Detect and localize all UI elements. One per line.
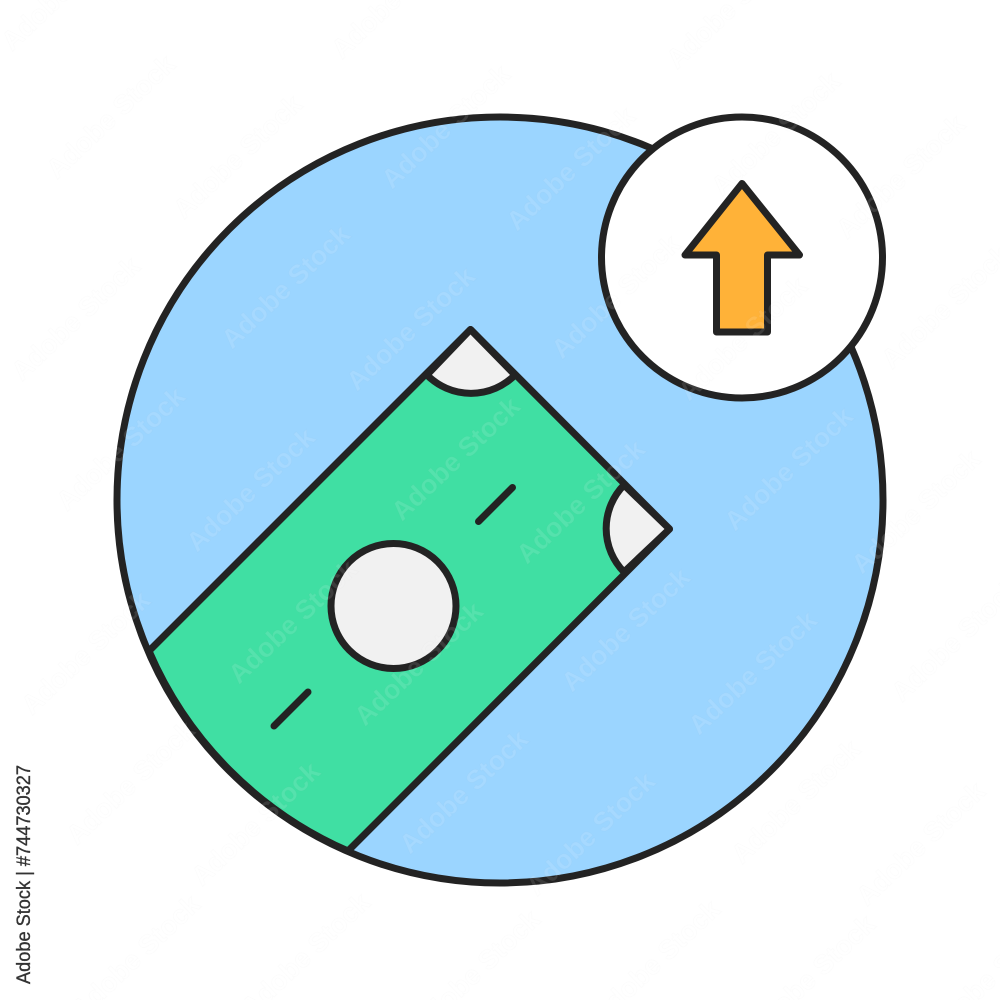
watermark pattern: Adobe Stock xyxy=(167,88,309,224)
watermark pattern: Adobe Stock xyxy=(60,714,202,850)
top corner xyxy=(427,330,515,393)
note body xyxy=(149,330,670,851)
watermark pattern: Adobe Stock xyxy=(180,421,322,557)
watermark pattern: Adobe Stock xyxy=(672,270,814,406)
watermark pattern: Adobe Stock xyxy=(15,584,157,720)
white badge circle xyxy=(602,117,882,398)
watermark pattern: Adobe Stock xyxy=(845,443,987,579)
watermark pattern: Adobe Stock xyxy=(545,228,687,364)
watermark pattern: Adobe Stock xyxy=(393,723,535,859)
watermark pattern: Adobe Stock xyxy=(185,755,327,891)
watermark pattern: Adobe Stock xyxy=(718,400,860,536)
watermark pattern: Adobe Stock xyxy=(830,108,972,244)
watermark pattern: Adobe Stock xyxy=(500,100,642,236)
watermark pattern: Adobe Stock xyxy=(50,380,192,516)
right corner xyxy=(606,485,670,572)
stock id caption: Adobe Stock | #744730327 xyxy=(14,765,35,984)
up arrow xyxy=(685,184,800,332)
watermark pattern: Adobe Stock xyxy=(348,595,490,731)
watermark pattern: Adobe Stock xyxy=(555,561,697,697)
lower dash xyxy=(274,692,308,726)
watermark pattern: Adobe Stock xyxy=(510,433,652,569)
large blue circle xyxy=(117,117,883,883)
centre circle xyxy=(331,544,456,668)
watermark pattern: Adobe Stock xyxy=(215,218,357,354)
banknote xyxy=(149,330,670,851)
watermark pattern: Adobe Stock xyxy=(5,250,147,386)
watermark pattern: Adobe Stock xyxy=(682,604,824,740)
watermark pattern: Adobe Stock xyxy=(725,733,867,869)
watermark pattern: Adobe Stock xyxy=(520,765,662,901)
watermark pattern: Adobe Stock xyxy=(705,65,847,201)
watermark pattern: Adobe Stock xyxy=(850,775,992,911)
upper dash xyxy=(478,488,512,522)
watermark pattern: Adobe Stock xyxy=(40,48,182,184)
watermark pattern: Adobe Stock xyxy=(222,553,364,689)
watermark pattern: Adobe Stock xyxy=(385,390,527,526)
watermark pattern: Adobe Stock xyxy=(340,260,482,396)
watermark pattern: Adobe Stock xyxy=(375,58,517,194)
